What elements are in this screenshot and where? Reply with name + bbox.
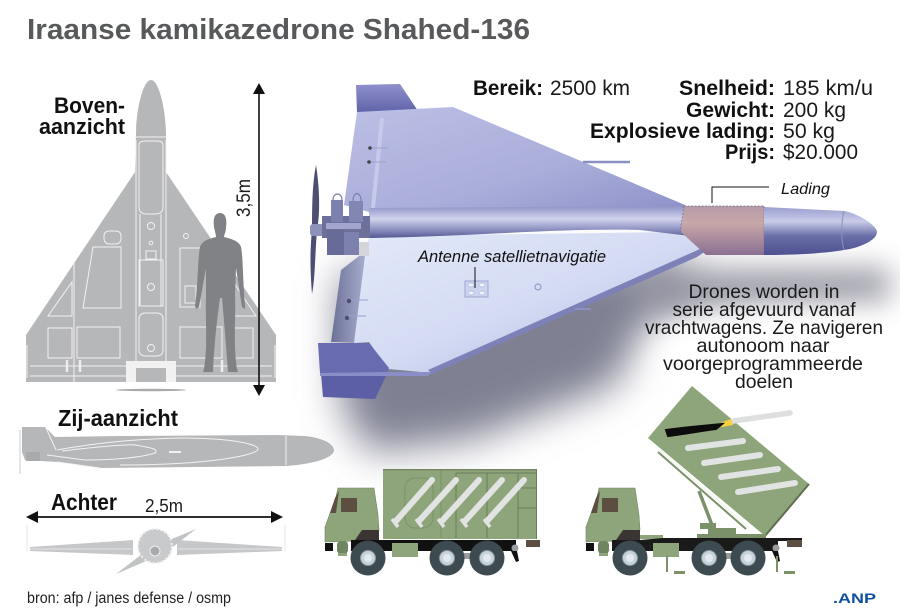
heading: top view line 2: aanzicht xyxy=(39,114,125,139)
antenna panel xyxy=(465,281,488,297)
launched missile xyxy=(733,413,790,421)
cabin xyxy=(586,488,640,542)
stats: range: 2500 km xyxy=(550,77,630,100)
wheels xyxy=(612,540,648,576)
stats: weight: 200 kg xyxy=(783,99,846,122)
panel: side view silhouette xyxy=(20,427,334,474)
panel: top view drone silhouette xyxy=(26,80,276,391)
stats: range xyxy=(473,77,630,100)
chassis xyxy=(325,543,333,551)
arrow: height 3,5m xyxy=(253,83,265,396)
stats: price: $20.000 xyxy=(783,141,858,164)
launcher panel xyxy=(648,386,809,536)
callout: payload: Lading xyxy=(781,181,830,198)
icon: human silhouette xyxy=(195,213,245,372)
strut xyxy=(699,491,712,525)
cargo box xyxy=(383,469,537,539)
lower wing xyxy=(354,232,709,373)
stats: price: Prijs: xyxy=(725,141,775,164)
text block: description xyxy=(645,281,883,393)
text block: description: serie afgevuurd vanaf xyxy=(672,299,856,321)
drone main illustration xyxy=(310,84,877,399)
callout: satellite antenna: Antenne satellietnavigatie xyxy=(417,248,606,266)
payload section xyxy=(681,206,764,255)
left dark strip xyxy=(331,253,366,342)
source: bron: afp / janes defense / osmp xyxy=(27,590,231,607)
launch rail xyxy=(658,452,746,529)
stats: speed xyxy=(679,77,873,100)
bottom fin xyxy=(321,374,387,399)
stabilizer legs xyxy=(667,556,777,572)
label: 2,5m: 2,5m xyxy=(145,496,183,516)
heading: rear view: Achter xyxy=(51,489,117,515)
stats: price xyxy=(725,141,858,164)
arrow: width 2,5m xyxy=(26,511,283,523)
text block: description: voorgeprogrammeerde xyxy=(663,353,863,375)
missiles xyxy=(396,480,524,521)
stats: weight: Gewicht: xyxy=(686,99,775,122)
drone shadow xyxy=(340,262,890,452)
missiles on launcher xyxy=(688,441,795,492)
panel: rear view silhouette xyxy=(27,525,285,574)
top wing xyxy=(344,107,690,212)
propeller xyxy=(310,165,319,294)
text block: description: vrachtwagens. Ze navigeren xyxy=(645,317,883,339)
fuselage xyxy=(369,206,690,238)
heading: side view: Zij-aanzicht xyxy=(58,405,178,431)
top fin xyxy=(356,84,418,113)
stats: range: Bereik: xyxy=(473,77,543,100)
text block: description: doelen xyxy=(735,371,793,393)
chassis xyxy=(640,535,663,539)
logo: ANP: .ANP xyxy=(833,591,876,606)
engine xyxy=(310,194,370,256)
truck: transport configuration xyxy=(325,469,540,576)
heading: top view: Boven- xyxy=(54,93,125,118)
nose xyxy=(764,207,877,255)
stats: speed: Snelheid: xyxy=(679,77,775,100)
stats: explosive charge: 50 kg xyxy=(783,120,835,143)
stats: speed: 185 km/u xyxy=(783,77,873,100)
text block: description: Drones worden in xyxy=(688,281,840,303)
stats: weight xyxy=(686,99,846,122)
wheels xyxy=(350,540,386,576)
text block: description: autonoom naar xyxy=(696,335,830,357)
label: 3,5m: 3,5m xyxy=(233,179,255,217)
title: Iraanse kamikazedrone Shahed-136 xyxy=(27,14,530,46)
truck: launch configuration xyxy=(586,386,809,576)
callout: payload xyxy=(712,181,830,203)
cabin xyxy=(325,488,379,542)
stats: explosive charge: Explosieve lading: xyxy=(590,120,775,143)
